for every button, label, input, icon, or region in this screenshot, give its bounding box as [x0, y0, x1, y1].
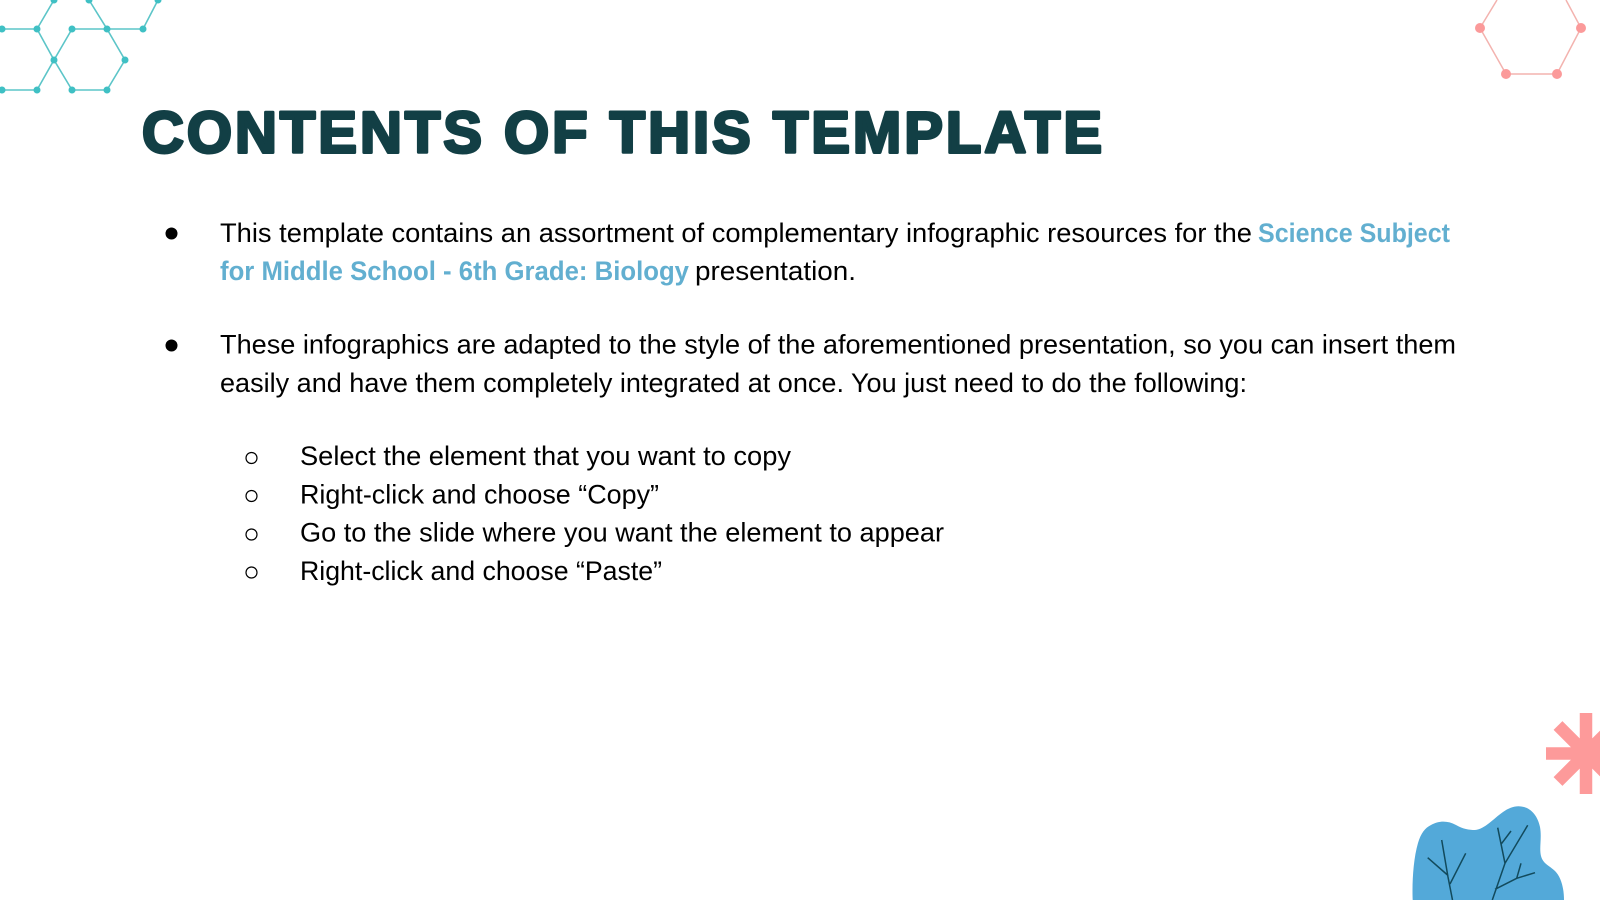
bullet 1 line 2 text: presentation. — [695, 256, 856, 286]
sub-list of steps — [246, 441, 944, 586]
bullet marker 2 — [166, 340, 178, 352]
bullet 2 line 1 text: These infographics are adapted to the style of the aforementioned presentation, so you can insert them — [220, 330, 1456, 360]
step 1 text: Select the element that you want to copy — [300, 441, 792, 471]
decoration: pink hexagon — [1475, 0, 1586, 79]
bullet 1 line 1 text: This template contains an assortment of complementary infographic resources for the — [220, 218, 1252, 248]
bullet marker 1 — [166, 228, 178, 240]
step 3 marker — [246, 529, 257, 540]
icon: blue leaf plant — [1413, 806, 1564, 900]
bullet 2 line 2 text: easily and have them completely integrated at once. You just need to do the following: — [220, 368, 1247, 398]
link text part 1: Science Subject — [1258, 218, 1450, 248]
decoration: teal hexagon network — [0, 0, 162, 94]
step 2 marker — [246, 490, 257, 502]
icon: pink asterisk — [1546, 713, 1600, 794]
bullet 1 — [166, 218, 1450, 286]
title: CONTENTS OF THIS TEMPLATE — [142, 100, 1102, 166]
bullet 2 — [166, 330, 1456, 398]
link text part 2: for Middle School - 6th Grade: Biology — [220, 256, 689, 286]
step 1 marker — [246, 452, 257, 464]
step 3 text: Go to the slide where you want the element to appear — [300, 518, 944, 548]
step 4 marker — [246, 567, 257, 578]
step 2 text: Right-click and choose “Copy” — [300, 480, 659, 510]
step 4 text: Right-click and choose “Paste” — [300, 556, 662, 586]
